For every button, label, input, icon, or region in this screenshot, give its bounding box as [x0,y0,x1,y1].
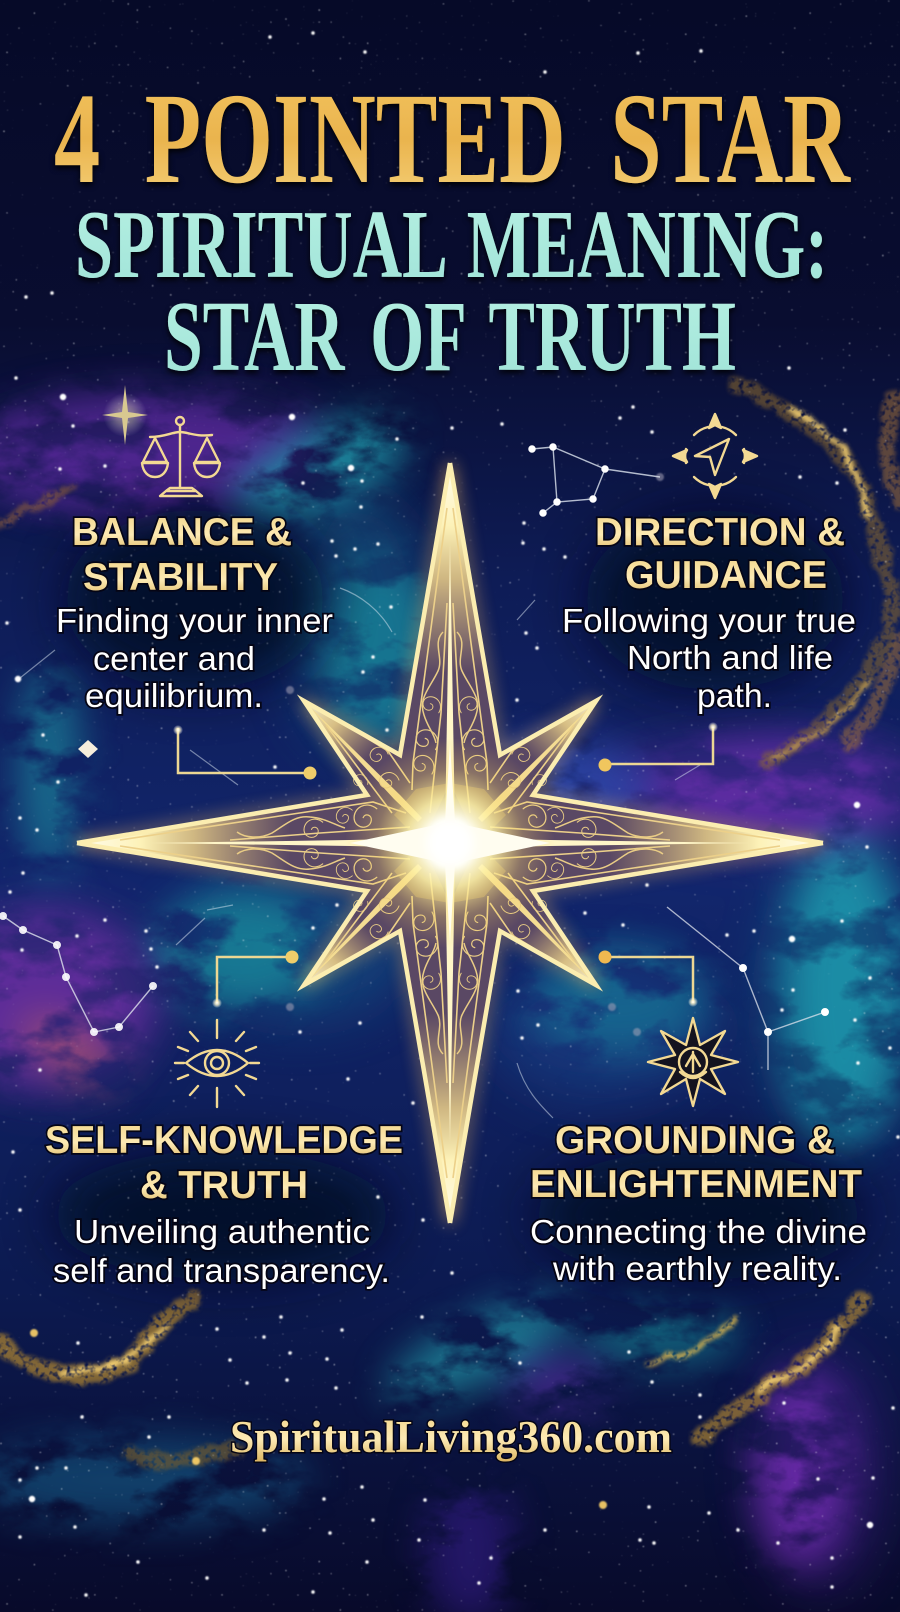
website url: SpiritualLiving360.com [230,1411,672,1462]
constellation: lower right [667,907,825,1070]
text block: self-knowledge and truth: & TRUTH [140,1164,308,1207]
sparkle star [102,385,148,445]
sparkle diamond [78,740,98,758]
text block: grounding and enlightenment: with earthly reality. [552,1250,842,1287]
icon: eye [175,1020,259,1107]
text block: direction and guidance [562,511,856,714]
icon: balance scales [142,417,220,496]
text block: balance and stability: Finding your inner [56,602,333,639]
text block: self-knowledge and truth: SELF-KNOWLEDGE [45,1119,403,1162]
constellation: upper right [532,447,660,513]
text block: grounding and enlightenment: Connecting the divine [530,1213,867,1250]
text block: grounding and enlightenment [530,1119,867,1287]
decorative gold dust [0,385,900,1460]
constellation: lower left [3,916,153,1032]
text block: direction and guidance: North and life [627,639,833,676]
text block: grounding and enlightenment: ENLIGHTENMENT [530,1163,862,1206]
text block: balance and stability: STABILITY [83,556,278,599]
four pointed star [77,463,823,1223]
title [54,67,851,392]
text block: direction and guidance: DIRECTION & [595,511,845,554]
dark halos behind text [52,510,863,1280]
connector: bottom left [212,950,298,1008]
text block: direction and guidance: Following your true [562,602,856,639]
text block: self-knowledge and truth [45,1119,403,1289]
connector: top right [598,722,718,772]
connector: bottom right [598,950,698,1007]
text block: self-knowledge and truth: self and transparency. [53,1252,390,1289]
text block: self-knowledge and truth: Unveiling authentic [74,1213,370,1250]
text block: balance and stability: center and [93,640,255,677]
text block: direction and guidance: path. [697,677,772,714]
text block: balance and stability [56,511,333,714]
icon: star emblem [648,1018,738,1106]
text block: balance and stability: equilibrium. [85,677,263,714]
text block: grounding and enlightenment: GROUNDING & [555,1119,835,1162]
icon: compass [673,414,757,498]
text block: balance and stability: BALANCE & [72,511,292,554]
text block: direction and guidance: GUIDANCE [625,554,827,597]
connector: top left [173,725,316,780]
